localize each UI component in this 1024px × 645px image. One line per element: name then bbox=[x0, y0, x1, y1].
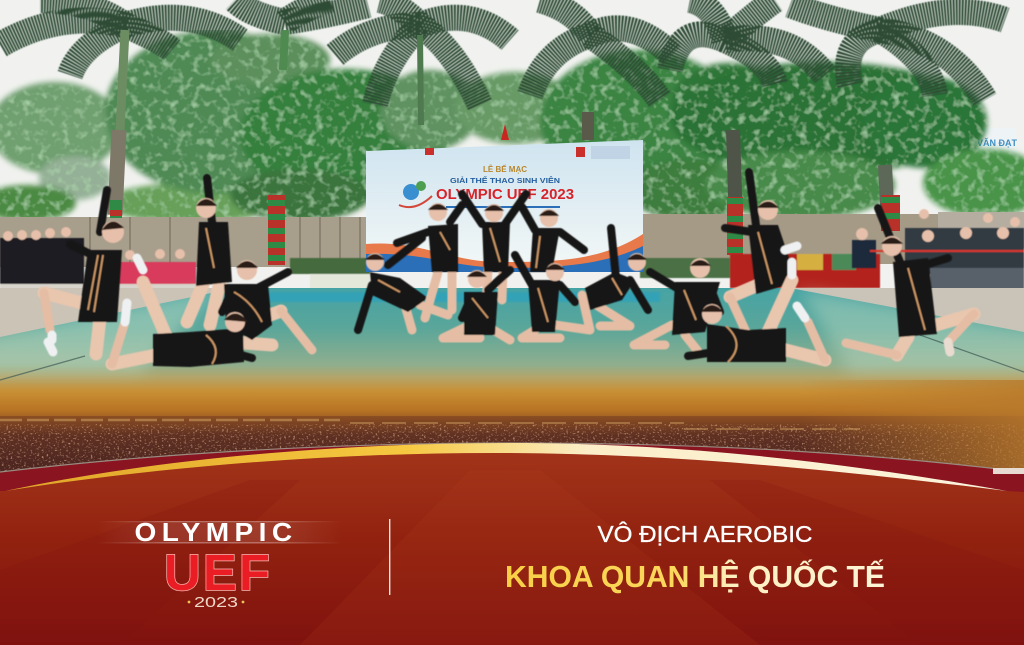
hedge and red table bbox=[290, 254, 880, 292]
palm trunks bbox=[115, 30, 888, 225]
spectators left bbox=[0, 227, 200, 290]
dancer 7: centre bbox=[462, 194, 526, 310]
subtitle: VÔ ĐỊCH AEROBIC bbox=[598, 520, 813, 547]
spectators right bbox=[852, 209, 1024, 292]
red bottom panel bbox=[0, 443, 1024, 645]
dancer 10 bbox=[515, 255, 590, 338]
billboard far right bbox=[976, 128, 1018, 156]
logo word UEF: UEF bbox=[164, 544, 272, 601]
stage banner bbox=[366, 140, 643, 272]
dancers group bbox=[44, 172, 974, 367]
stadium crowd band bbox=[0, 380, 1024, 472]
stage banner: GIẢI THỂ THAO SINH VIÊN bbox=[450, 176, 560, 185]
heading bbox=[505, 520, 885, 594]
logo speed streaks bbox=[97, 521, 342, 544]
gold swoosh bbox=[5, 443, 1007, 491]
dancer 3: sitting bbox=[222, 260, 312, 350]
dancer 9 bbox=[443, 270, 510, 340]
dancer 6 bbox=[397, 203, 462, 318]
red flag bbox=[501, 124, 509, 140]
banner emblem bbox=[399, 181, 432, 207]
striped pillars bbox=[110, 195, 900, 265]
logo dots bbox=[188, 601, 244, 603]
stage banner: OLYMPIC UEF 2023 bbox=[436, 186, 574, 203]
dancer 8 bbox=[522, 207, 584, 272]
dancer 11 bbox=[585, 228, 648, 326]
billboard far right: VĂN ĐẠT bbox=[977, 138, 1018, 148]
logo word olympic: OLYMPIC bbox=[134, 517, 298, 547]
vertical divider bbox=[389, 519, 390, 595]
title: KHOA QUAN HỆ QUỐC TẾ bbox=[505, 558, 885, 594]
banner text: LỄ BẾ MẠC bbox=[483, 164, 527, 174]
dancer 4: front lying bbox=[112, 258, 252, 367]
dancer 1: far left kneeling bbox=[44, 190, 124, 354]
dancer 15: far right bbox=[846, 208, 974, 355]
photo scene background bbox=[0, 0, 1024, 472]
background tree canopies bbox=[0, 30, 1024, 223]
palm fronds bbox=[0, 0, 1005, 105]
dancer 14: right standing bbox=[725, 172, 797, 332]
logo: Olympic UEF 2023 bbox=[97, 517, 342, 611]
dancer 13: front lying right bbox=[688, 246, 825, 362]
floor bbox=[0, 288, 1024, 470]
fence wall bbox=[0, 212, 1024, 267]
dancer 2: standing bbox=[187, 178, 232, 325]
dancer 5 bbox=[358, 238, 448, 330]
logo year: 2023 bbox=[194, 594, 238, 611]
dancer 12 bbox=[634, 258, 720, 350]
